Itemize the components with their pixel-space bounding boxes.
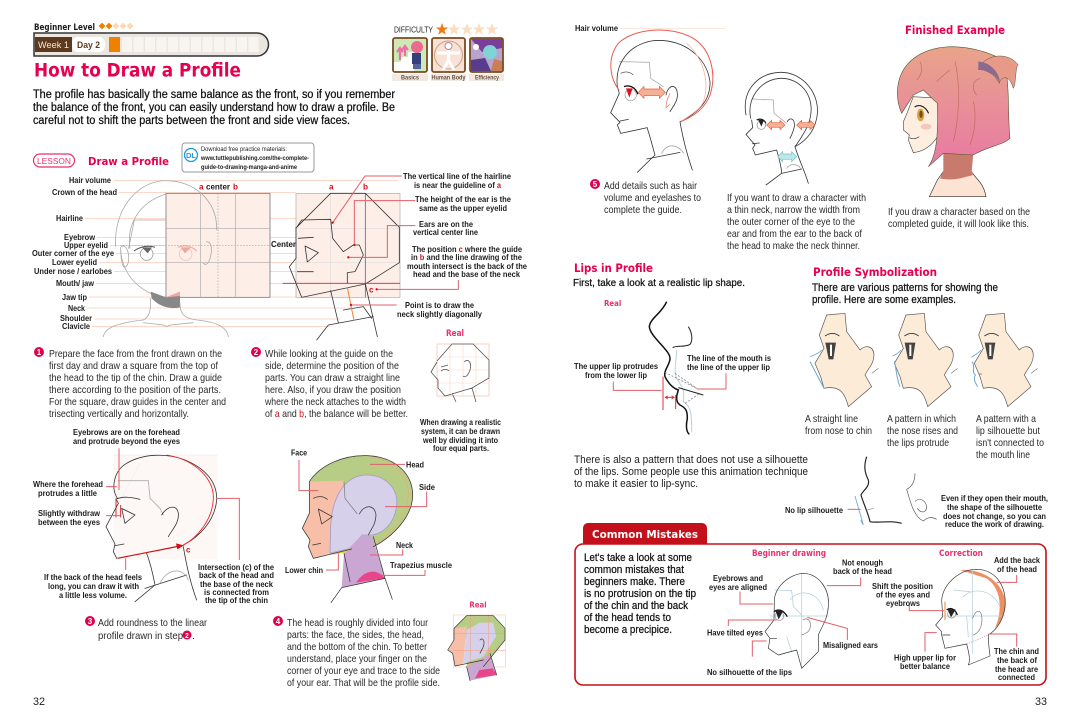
step 5 drawing: hair volume [611, 28, 725, 172]
left anatomy labels: Outer corner of the eye [32, 249, 114, 258]
icon: efficiency [470, 38, 503, 72]
step 5 text: 5 [593, 180, 598, 189]
icon: basics [393, 38, 427, 72]
icon captions [401, 76, 500, 82]
face captions: A pattern in which [887, 413, 956, 425]
step 5 text: complete the guide. [604, 204, 682, 216]
step 3 notes: and protrude beyond the eyes [73, 437, 180, 446]
mistake labels [707, 556, 1040, 682]
left anatomy labels: Hairline [56, 214, 83, 223]
guide letters: Center [271, 240, 297, 249]
diagram: front and side guide [32, 172, 527, 340]
mistake labels: better balance [900, 662, 950, 671]
no silhouette paragraph: to make it easier to lip-sync. [574, 478, 698, 490]
no lip silhouette labels: No lip silhouette [785, 506, 843, 515]
realistic lip diagram: Real [604, 299, 622, 308]
finished example caption: If you draw a character based on the [888, 206, 1030, 218]
intro paragraph [33, 89, 395, 127]
mistakes paragraph: beginners make. There [584, 576, 685, 588]
step 3 notes: between the eyes [38, 518, 100, 527]
lip labels: The upper lip protrudes [574, 362, 658, 371]
left anatomy labels [32, 176, 117, 331]
difficulty rating [394, 23, 498, 35]
progress bar: week 1 day 2: Day 2 [77, 40, 100, 51]
face captions: the nose rises and [887, 425, 958, 437]
guide letters: a [199, 182, 204, 192]
profile symbolization heading [812, 265, 998, 306]
mistake labels: of the head [997, 565, 1037, 574]
left anatomy labels: Crown of the head [52, 188, 117, 197]
step 4 part labels: Lower chin [285, 566, 323, 575]
right notes: head and the base of the neck [413, 270, 520, 279]
mistake labels: eyes are aligned [709, 583, 767, 592]
right notes: mouth intersect is the back of the [407, 262, 527, 271]
step 1 text: Prepare the face from the front drawn on the [49, 348, 222, 360]
finished example caption [888, 206, 1030, 230]
finished character illustration [897, 47, 1018, 197]
step 4 text: The head is roughly divided into four [287, 617, 428, 629]
icon captions: Efficiency [475, 76, 500, 82]
step 4 part labels: Trapezius muscle [390, 561, 452, 570]
note: realistic system: four equal parts. [433, 444, 489, 453]
thin neck text: the outer corner of the eye to the [727, 216, 855, 228]
face captions: lip silhouette but [976, 425, 1040, 437]
icon: human body [432, 38, 465, 72]
step 2 text: side, determine the position of the [265, 360, 399, 372]
step 3 notes [33, 428, 274, 605]
download callout: Download free practice materials: [201, 146, 287, 153]
step 2 text: 2 [254, 348, 259, 357]
step 3 text: 3 [88, 617, 93, 626]
step 5 text: volume and eyelashes to [604, 192, 701, 204]
thin neck text [727, 192, 866, 252]
face captions: isn't connected to [976, 437, 1044, 449]
mistake labels: back of the head [833, 567, 892, 576]
lips in profile heading: Lips in Profile [574, 261, 653, 275]
note: realistic system: well by dividing it into [422, 436, 498, 445]
left anatomy labels: Hair volume [69, 176, 111, 185]
finished example heading: Finished Example [905, 23, 1005, 37]
mistakes paragraph: is no protrusion on the tip [584, 588, 696, 600]
step 3 notes: Where the forehead [33, 480, 103, 489]
mistake labels: High upper lip for [894, 654, 957, 662]
face examples [810, 313, 1038, 407]
no silhouette paragraph: There is also a pattern that does not use a silhouette [574, 454, 808, 466]
guide letters: center [206, 182, 231, 192]
note: realistic system: When drawing a realistic [420, 418, 501, 427]
right notes: The vertical line of the hairline [403, 172, 511, 181]
mistakes paragraph [584, 552, 696, 636]
download callout: DL [186, 151, 196, 160]
step 4 part labels: Side [419, 483, 435, 492]
face: nose rises [893, 313, 958, 407]
mistake labels: Misaligned ears [823, 641, 878, 650]
profile symbolization heading: There are various patterns for showing the [812, 282, 998, 294]
guide letters: b [363, 182, 368, 192]
face captions: from nose to chin [805, 425, 872, 437]
step 4 text: corner of your eye and trace to the side [287, 665, 440, 677]
no lip silhouette labels [785, 494, 1048, 529]
lip labels: from the lower lip [585, 371, 647, 380]
thin neck drawing [745, 72, 817, 185]
face: straight line [810, 313, 878, 407]
step 4 part labels: Head [406, 460, 424, 470]
download callout: www.tuttlepublishing.com/the-complete- [200, 155, 309, 162]
profile symbolization heading: Profile Symbolization [813, 265, 937, 279]
right notes: The position c where the guide [412, 245, 522, 254]
lip labels [574, 354, 771, 380]
left anatomy labels: Jaw tip [62, 293, 87, 302]
no silhouette paragraph [574, 454, 808, 490]
step 4 text [273, 616, 440, 689]
real colored head [448, 600, 505, 681]
step 4 part labels: Face [291, 448, 307, 458]
step 4 text: 4 [276, 617, 281, 626]
progress bar: week 1 day 2: Week 1 [38, 40, 69, 51]
step 2 text: parts. You can draw a straight line [265, 372, 400, 384]
lip labels: The line of the mouth is [687, 354, 771, 363]
note: realistic system [420, 418, 501, 453]
front face guide [103, 181, 270, 337]
step 2 text: here. Also, if you draw the position [265, 384, 401, 396]
right notes: same as the upper eyelid [419, 204, 507, 213]
mistake labels: the back of [997, 656, 1037, 665]
step 3 notes: If the back of the head feels [44, 573, 142, 582]
step 2 text [251, 347, 408, 420]
step 2 text: While looking at the guide on the [265, 348, 393, 360]
mistake labels: of the eyes and [876, 590, 930, 600]
step 3 notes: Eyebrows are on the forehead [73, 428, 180, 437]
guide letters: c [369, 286, 374, 294]
step 2 text: of a and b, the balance will be better. [265, 408, 408, 420]
step 3 notes: protrudes a little [38, 489, 97, 498]
step 4 text: understand, place your finger on the [287, 653, 427, 665]
left anatomy labels: Eyebrow [64, 233, 96, 242]
left anatomy labels: Upper eyelid [64, 241, 108, 250]
right notes [397, 172, 527, 319]
mistakes paragraph: become a precipice. [584, 624, 672, 636]
step 3 notes: a little less volume. [59, 591, 127, 600]
beginner head drawing [728, 573, 861, 668]
mistake labels: Have tilted eyes [707, 628, 763, 638]
right notes: vertical center line [413, 228, 478, 237]
step 3 notes: long, you can draw it with [48, 582, 139, 591]
step 1 text: first day and draw a square from the top of [49, 360, 218, 372]
thin neck text: a thin neck, narrow the width from [727, 204, 860, 216]
hair volume label: Hair volume [575, 24, 618, 33]
realistic head sketch [431, 329, 489, 402]
mistake labels: Not enough [842, 558, 883, 568]
left anatomy labels: Clavicle [62, 322, 90, 331]
left anatomy labels: Neck [68, 304, 85, 313]
mistakes paragraph: of the chin and the back [584, 600, 688, 612]
no lip silhouette labels: the shape of the silhouette [947, 503, 1042, 512]
beginner level label: Beginner Level [34, 23, 95, 33]
common mistakes tab [583, 523, 707, 544]
step 4 part labels [285, 448, 452, 575]
step 1 text: For the square, draw guides in the center and [49, 396, 226, 408]
mistake labels: eyebrows [886, 599, 920, 608]
page number 33: 33 [1035, 696, 1047, 708]
right notes: is near the guideline of a [414, 181, 501, 190]
right notes: neck slightly diagonally [397, 310, 482, 319]
download callout [182, 143, 314, 172]
mistake labels: Add the back [994, 556, 1040, 565]
common mistakes tab: Common Mistakes [592, 528, 698, 541]
step 4 drawing: colored head parts [299, 456, 427, 603]
mistake labels: The chin and [994, 647, 1039, 656]
step 5 text: Add details such as hair [604, 180, 697, 192]
intro paragraph: The profile has basically the same balance as the front, so if you remember [33, 89, 395, 101]
step 5 text [575, 24, 701, 216]
step 1 text: 1 [37, 348, 42, 357]
side profile guide [283, 176, 458, 340]
mistakes frame [575, 544, 1046, 685]
intro paragraph: the balance of the front, you can easily understand how to draw a profile. Be [33, 102, 395, 114]
lips in profile heading [573, 261, 745, 289]
step 3 text: Add roundness to the linear [98, 617, 207, 629]
lesson heading: Draw a Profile [88, 155, 169, 168]
mistakes paragraph: of the head tends to [584, 612, 671, 624]
step 1 text: there according to the position of the parts. [49, 384, 221, 396]
corrected head drawing [909, 569, 1017, 665]
no silhouette paragraph: of the lips. Some people use this animation technique [574, 466, 808, 478]
guide letters: b [233, 182, 238, 192]
real colored head: Real [469, 600, 487, 609]
step 4 part labels: Neck [396, 541, 413, 550]
mistakes paragraph: common mistakes that [584, 564, 684, 576]
thin neck text: the head to make the neck thinner. [727, 240, 860, 252]
left anatomy labels: Shoulder [60, 314, 93, 323]
step 3 text: 2 [185, 633, 189, 640]
step 3 notes: the tip of the chin [205, 596, 268, 605]
no lip silhouette drawings [848, 457, 937, 525]
step 2 text: where the neck attaches to the width [264, 396, 406, 408]
face captions: the lips protrude [887, 437, 949, 449]
no lip silhouette labels: Even if they open their mouth, [941, 494, 1048, 503]
panel: common mistakes [575, 523, 1046, 685]
mistake labels: No silhouette of the lips [707, 668, 792, 677]
no lip silhouette labels: does not change, so you can [943, 512, 1046, 521]
lesson heading: LESSON [37, 156, 71, 166]
step 3 notes: Slightly withdraw [38, 509, 101, 518]
mistake labels: connected [998, 673, 1035, 682]
face captions: A straight line [805, 413, 858, 425]
intro paragraph: careful not to shift the parts between the front and side view faces. [33, 115, 350, 127]
thin neck text: If you want to draw a character with [727, 192, 866, 204]
left anatomy labels: Under nose / earlobes [34, 267, 112, 276]
correction heading: Correction [939, 549, 983, 559]
step 3 text: . [192, 630, 195, 642]
mistake labels: the head are [995, 665, 1038, 674]
realistic lip diagram [604, 299, 726, 434]
note: realistic system: system, it can be drawn [421, 427, 500, 436]
step 3 notes: Intersection (c) of the [198, 563, 274, 572]
face: lip silhouette [971, 313, 1038, 407]
right notes: Ears are on the [419, 220, 473, 229]
step 3 notes: is connected from [204, 588, 269, 597]
left anatomy labels: Mouth/ jaw [56, 279, 95, 288]
lip labels: the line of the upper lip [687, 363, 770, 372]
finished example caption: completed guide, it will look like this. [888, 218, 1029, 230]
guide letters: a [329, 182, 334, 192]
title: How to Draw a Profile [34, 60, 241, 82]
right notes: Point is to draw the [405, 301, 474, 310]
lips in profile heading: First, take a look at a realistic lip shape. [573, 277, 745, 289]
mistake labels: Shift the position [872, 582, 933, 591]
step 1 text: the head to the tip of the chin. Draw a guide [49, 372, 222, 384]
step 1 text: trisecting vertically and horizontally. [49, 408, 189, 420]
step 3 notes: back of the head and [199, 571, 274, 580]
step 1 text [34, 347, 226, 420]
icon captions: Human Body [432, 76, 466, 82]
step 4 text: parts: the face, the sides, the head, [287, 629, 424, 641]
left anatomy labels: Lower eyelid [52, 258, 97, 267]
thin neck text: ear and from the ear to the back of [727, 228, 862, 240]
icon captions: Basics [401, 76, 420, 82]
face captions: the mouth line [976, 449, 1030, 461]
realistic head sketch: Real [446, 329, 464, 339]
step 3 text: profile drawn in step [98, 630, 183, 642]
guide letters [199, 182, 374, 294]
download callout: guide-to-drawing-manga-and-anime [201, 164, 297, 171]
lesson heading [34, 154, 169, 168]
mistakes paragraph: Let's take a look at some [584, 552, 692, 564]
beginner drawing heading: Beginner drawing [752, 549, 826, 559]
mistake labels: Eyebrows and [713, 574, 763, 583]
step 4 text: of your ear. That will be the profile side. [287, 677, 440, 689]
right notes: in b and the line drawing of the [411, 253, 522, 262]
step 3 drawing: rounded head: c [186, 546, 191, 555]
step 4 text: and the bottom of the chin. To better [287, 641, 427, 653]
progress bar: week 1 day 2 [34, 33, 268, 56]
no lip silhouette labels: reduce the work of drawing. [945, 520, 1044, 529]
profile symbolization heading: profile. Here are some examples. [812, 294, 956, 306]
skill icons [392, 38, 504, 82]
face captions: A pattern with a [976, 413, 1036, 425]
face captions [805, 413, 1044, 461]
right notes: The height of the ear is the [415, 195, 511, 204]
step 3 drawing: rounded head [106, 448, 239, 602]
difficulty rating: DIFFICULTY [394, 26, 434, 34]
step 3 notes: the base of the neck [200, 580, 273, 589]
step 3 text [85, 616, 207, 642]
page number 32: 32 [33, 696, 45, 708]
